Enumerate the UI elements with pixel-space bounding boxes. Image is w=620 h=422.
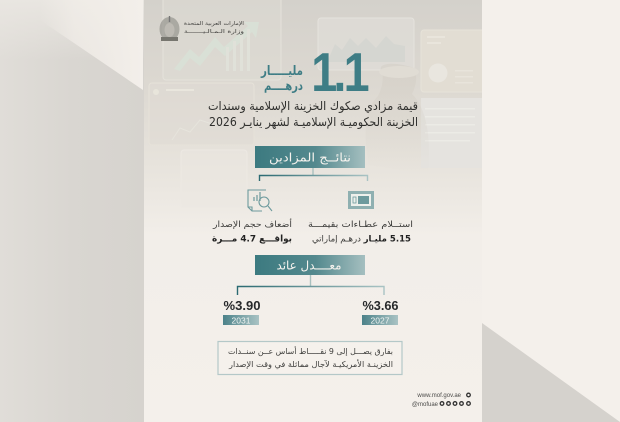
footer: website: www.mof.gov.ae [416,393,462,399]
footer: social handle and icons [412,402,470,408]
icon: banknote [348,191,374,209]
lower-left screen [148,82,254,98]
headline unit [260,64,303,94]
value: 2031 yield: %3.90 [224,299,261,313]
text: subscription multiple: بواقـــع 4.7 مـــرة [212,234,292,244]
background: right cream field [482,0,620,422]
background: left light triangle [40,0,143,90]
callout: spread note: بفارق يصـــل إلى 9 نقـــــاط أساس عــن سنــدات [228,346,393,357]
pie chart screen [420,30,482,92]
bracket: yield [238,275,384,295]
headline unit: مليـــــار [260,64,303,79]
bracket: results [260,168,368,181]
lower-centre faint screen [181,150,248,156]
tag: 2027: 2027 [371,316,390,326]
heading: yield rate: معــــدل عائد [276,258,342,272]
background: left top fade [0,0,144,60]
dashboard imagery background [148,0,482,156]
heading: auction results [255,146,365,168]
text: subscription multiple: أضعاف حجم الإصدار [212,218,292,230]
chart screen with rising arrow [163,0,281,80]
headline number: 1.1 [311,41,370,103]
subtitle: قيمة مزادي صكوك الخزينة الإسلامية وسندات [208,99,418,114]
logo: UAE emblem [160,16,180,41]
heading: auction results: نتائــج المزادين [269,150,351,166]
heading: yield rate [255,255,365,275]
man silhouette [380,64,414,70]
callout: spread note [218,342,402,374]
tag: 2027 [362,315,398,326]
headline unit: درهــــم [264,79,303,94]
text: bids received: 5.15 مليـار درهـم إماراتي [312,234,411,244]
background: left grey field [0,0,144,422]
subtitle [208,99,418,130]
logo: ministry name: الإمارات العربية المتحدة [184,21,244,27]
callout: spread note: الخزينـة الأمريكيـة لآجال مماثلة في وقت الإصدار [228,359,393,370]
text: subscription multiple [212,218,292,244]
mountain chart screen [318,18,414,70]
logo: ministry name [184,21,245,35]
background: right grey triangle [482,323,620,422]
tag: 2031: 2031 [232,316,251,326]
text: bids received [308,220,413,244]
tag: 2031 [223,315,259,326]
footer: social handle and icons: @mofuae [412,402,439,408]
value: 2027 yield: %3.66 [362,299,399,313]
subtitle: الخزينة الحكوميـة الإسلاميـة لشهر ينايـر 2026 [209,115,418,130]
right faint screen [421,98,482,142]
text: bids received: استــلام عطـاءات بقيمـــة [308,220,413,230]
icon: report with magnifier [248,190,272,211]
panel: infographic page [144,0,482,208]
logo: ministry name: وزارة الـمـالـيـــــــة [184,29,245,35]
